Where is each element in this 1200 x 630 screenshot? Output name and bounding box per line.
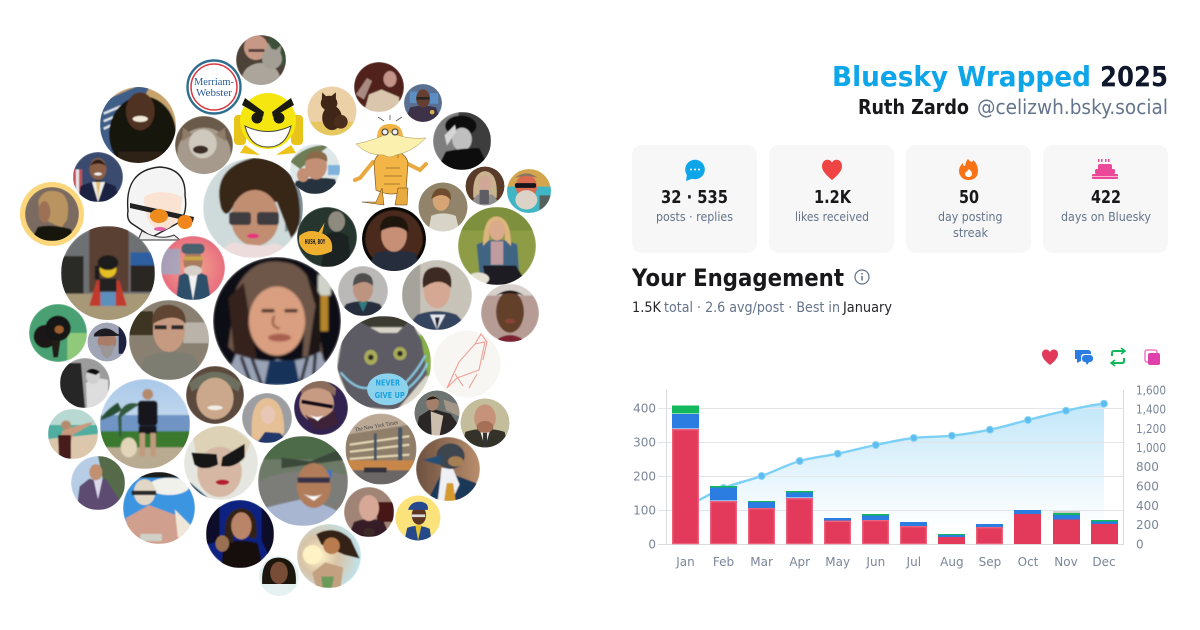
avatar: blonde fantasy woman — [242, 393, 292, 443]
avatar: New York Times building — [346, 414, 416, 484]
left axis labels: 300 — [633, 436, 656, 450]
avatar: New York Times building: The New York Times — [354, 420, 399, 433]
avatar: silver-haired man — [338, 266, 388, 316]
avatar: blonde woman with gold ring — [20, 182, 84, 246]
left axis labels: 100 — [633, 504, 656, 518]
avatar: cartoon man on yellow — [396, 496, 440, 540]
month labels: May — [825, 555, 850, 569]
panel: days on Bluesky: 422 — [1091, 187, 1121, 208]
right axis labels: 0 — [1136, 538, 1144, 552]
avatar: man with dog by the water — [100, 379, 190, 469]
month labels: Mar — [750, 555, 773, 569]
bar: Aug — [938, 534, 965, 544]
user name and handle: Ruth Zardo — [858, 95, 969, 119]
bar: May — [824, 518, 851, 544]
icon: info — [855, 270, 869, 284]
avatar: man with cat — [236, 35, 286, 85]
icon: heart — [822, 160, 842, 180]
month labels: Jan — [675, 555, 695, 569]
avatar: Kamala Harris — [206, 500, 274, 568]
month labels: Jun — [865, 555, 885, 569]
avatar: Hush boy meme — [297, 207, 357, 267]
icon: flame — [959, 159, 978, 180]
month labels: Apr — [789, 555, 810, 569]
panel: likes received — [769, 145, 894, 253]
right axis labels — [1136, 384, 1166, 552]
avatar: cartoon woman with orange glasses — [128, 167, 194, 240]
avatar: smiling woman — [259, 556, 299, 596]
left axis labels: 0 — [648, 538, 656, 552]
avatar: highlighted central portrait — [213, 257, 341, 385]
icon: birthday cake — [1092, 159, 1118, 179]
right axis labels: 1,400 — [1136, 403, 1166, 417]
avatar: woman in grey beanie — [186, 366, 244, 424]
avatar: bow-tie figurine — [161, 236, 225, 300]
month labels: Aug — [940, 555, 964, 569]
bar: Jul — [900, 522, 927, 544]
cumulative line — [686, 404, 1104, 505]
avatar: man with black ring — [362, 207, 426, 271]
user name and handle: @celizwh.bsky.social — [977, 95, 1168, 119]
avatar: Wonder Woman — [297, 524, 361, 588]
avatar: woman on beach — [48, 409, 98, 459]
right axis labels: 400 — [1136, 499, 1159, 513]
panel: day posting streak: streak — [953, 225, 989, 240]
month labels: Feb — [713, 555, 734, 569]
avatar: bearded man with cap — [88, 322, 126, 362]
title: 2025 — [1100, 60, 1168, 93]
stacked bars — [672, 406, 1118, 544]
bar: Mar — [748, 501, 775, 544]
avatar: woman with cat-eye sunglasses — [184, 423, 258, 500]
avatar: man with red face and sunglasses — [507, 169, 551, 213]
right axis labels: 1,200 — [1136, 422, 1166, 436]
panel: day posting streak: 50 — [959, 187, 979, 208]
panel: posts and replies: posts · replies — [656, 209, 733, 224]
avatar: angry smiley — [234, 93, 303, 155]
title: Bluesky Wrapped — [832, 60, 1091, 93]
engagement summary: total · 2.6 avg/post · Best in — [664, 300, 840, 316]
month labels: Oct — [1018, 555, 1039, 569]
avatar: grey cat with mask — [337, 316, 431, 410]
avatar: police officer — [404, 84, 442, 122]
engagement summary: 1.5K — [632, 300, 662, 316]
gridlines and axes — [658, 390, 1124, 544]
avatar: comic man — [123, 472, 195, 544]
bar: Jun — [862, 514, 889, 544]
month labels: Sep — [979, 555, 1001, 569]
avatar: man at right — [481, 284, 539, 342]
engagement summary: January — [842, 300, 892, 316]
avatar: grey cat with mask: GIVE UP — [375, 391, 405, 400]
left axis labels: 200 — [633, 470, 656, 484]
bar: Dec — [1091, 520, 1118, 544]
icon: likes legend — [1042, 350, 1058, 365]
avatar: smiling young man — [290, 144, 340, 194]
avatar: black and white men — [60, 358, 110, 408]
avatar: bearded man with glasses in purple — [294, 376, 348, 435]
avatar: spaniel dog — [29, 304, 87, 362]
bar: Feb — [710, 486, 737, 544]
avatar: bald man in suit — [460, 398, 510, 448]
avatar: Merriam-Webster logo — [188, 60, 240, 114]
heading: Your Engagement: Your Engagement — [631, 264, 844, 292]
month labels: Jul — [906, 555, 921, 569]
engagement chart — [633, 384, 1166, 569]
avatar: black and white woman — [433, 112, 491, 170]
right axis labels: 800 — [1136, 460, 1159, 474]
avatar: woman in dark red painting — [354, 62, 404, 112]
icon: chat bubble — [685, 160, 705, 181]
avatar: duck in a suit — [416, 437, 480, 501]
panel: day posting streak: day posting — [938, 209, 1002, 224]
avatar: man in coat — [414, 390, 460, 436]
avatar: man in purple jacket — [71, 456, 125, 510]
panel: likes received: likes received — [795, 209, 869, 224]
avatar: red sketch on white — [434, 330, 500, 398]
right axis labels: 200 — [1136, 518, 1159, 532]
left axis labels — [633, 402, 656, 552]
avatar: man in navy suit with flag — [73, 152, 123, 202]
avatar: grey cat with mask: NEVER — [376, 379, 400, 388]
avatar: kitten painting — [308, 86, 356, 136]
bar: Nov — [1053, 511, 1080, 544]
avatar: man with glasses and sweater — [129, 300, 211, 380]
avatar: blonde woman in meadow — [458, 207, 536, 285]
right axis labels: 1,000 — [1136, 441, 1166, 455]
avatar: Merriam-Webster logo: Merriam- — [194, 77, 234, 88]
avatar: bald man in dark shirt — [344, 487, 394, 537]
avatar cluster — [20, 35, 551, 596]
month labels: Nov — [1054, 555, 1078, 569]
month labels: Dec — [1092, 555, 1116, 569]
bar: Oct — [1014, 510, 1041, 544]
panel: day posting streak — [906, 145, 1031, 253]
avatar: woman with long dark hair — [100, 87, 176, 163]
panel: days on Bluesky — [1043, 145, 1168, 253]
chart legend — [1042, 348, 1160, 366]
icon: reposts legend — [1111, 348, 1125, 366]
avatar: blonde woman with phone — [466, 166, 504, 206]
avatar: Merriam-Webster logo: Webster — [196, 87, 232, 99]
bar: Apr — [786, 491, 813, 544]
avatar: Lorax character — [355, 115, 426, 205]
icon: replies legend — [1075, 350, 1093, 365]
avatar: smiling man with glasses outdoors — [258, 436, 348, 526]
avatar: Hush boy meme: HUSH, BOY — [305, 238, 325, 246]
cumulative points — [720, 400, 1108, 492]
avatar: curly-haired woman with glasses — [203, 158, 303, 258]
user name and handle — [858, 95, 1168, 119]
panel: posts and replies: 32 · 535 — [661, 187, 728, 208]
right axis labels: 600 — [1136, 480, 1159, 494]
avatar: hedgehog — [175, 116, 233, 179]
avatar: man in suit and tie — [402, 260, 472, 330]
icon: quotes legend — [1145, 350, 1160, 365]
right axis labels: 1,600 — [1136, 384, 1166, 398]
panel: posts and replies — [632, 145, 757, 253]
cumulative area — [686, 404, 1104, 544]
panel: days on Bluesky: days on Bluesky — [1061, 209, 1152, 224]
avatar: lego minifigure — [61, 226, 157, 322]
avatar: vintage portrait — [418, 182, 468, 232]
panel: likes received: 1.2K — [814, 187, 852, 208]
month labels — [675, 555, 1116, 569]
bar: Sep — [976, 524, 1003, 544]
bar: Jan — [672, 406, 699, 544]
left axis labels: 400 — [633, 402, 656, 416]
